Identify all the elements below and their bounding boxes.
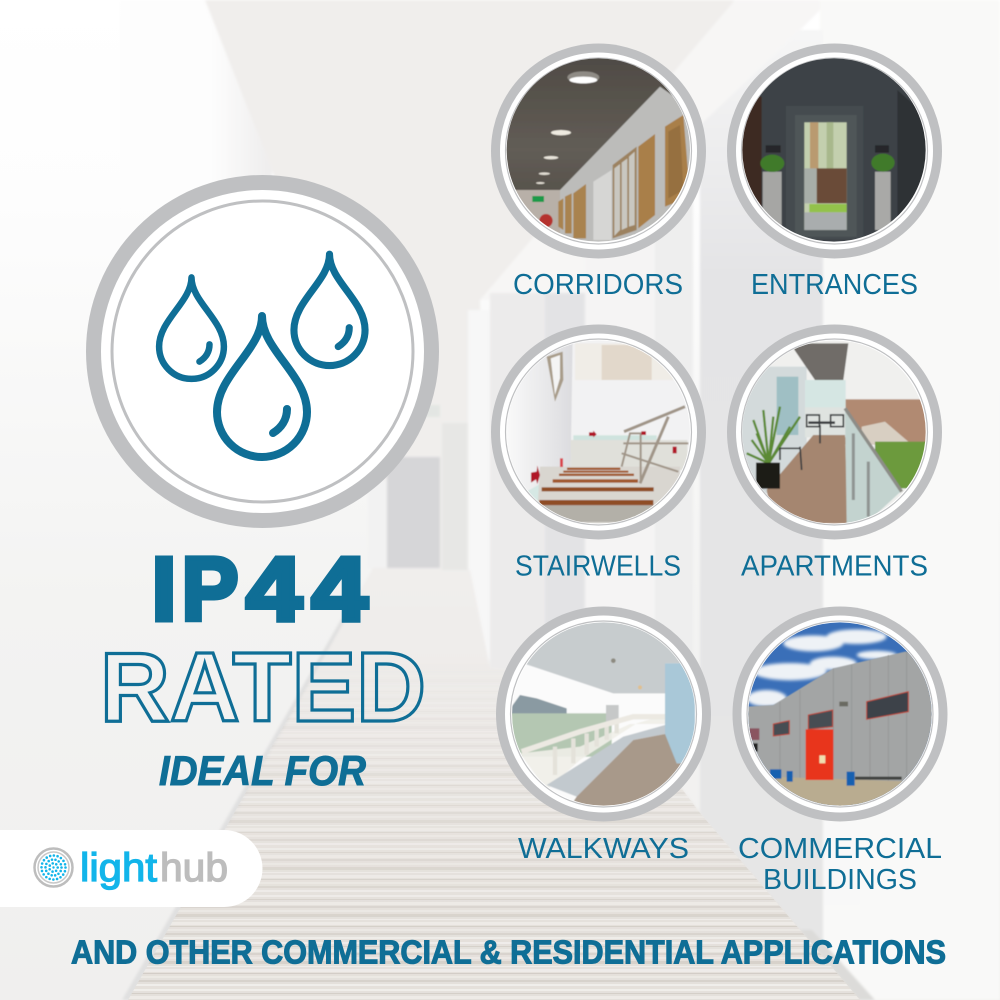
label: ENTRANCES [751, 269, 918, 301]
heading: IP44: 4 [312, 540, 368, 640]
panel: stairwells [491, 324, 706, 582]
heading: IDEAL FOR: IDEAL FOR [159, 747, 367, 794]
photo: walkway [510, 620, 700, 807]
photo: stairwell [503, 337, 693, 523]
panel: commercial buildings [732, 606, 948, 896]
heading: IP44: P [182, 540, 238, 640]
label: CORRIDORS [513, 269, 683, 301]
panel: apartments [727, 324, 942, 582]
logo wordmark: hub [160, 846, 228, 890]
heading: IP44: 4 [246, 540, 302, 640]
heading: RATED: RATED [100, 632, 426, 742]
photo: entrance [740, 57, 930, 243]
photo: apartment balcony [740, 337, 930, 523]
label: BUILDINGS [763, 864, 917, 896]
logo wordmark: light [80, 846, 157, 890]
label: WALKWAYS [518, 833, 689, 865]
logo pill [0, 830, 262, 907]
label: APARTMENTS [741, 550, 928, 582]
panel: entrances [727, 44, 942, 301]
photo: corridor [503, 57, 693, 243]
panel: corridors [491, 44, 706, 301]
label: COMMERCIAL [738, 833, 942, 865]
main badge: water drops [86, 175, 439, 528]
label: STAIRWELLS [515, 550, 681, 582]
footer text: AND OTHER COMMERCIAL & RESIDENTIAL APPLICATIONS [71, 934, 946, 970]
icon: lighthub logo mark [34, 848, 72, 886]
panel: walkways [496, 606, 711, 865]
photo: commercial building [747, 620, 937, 807]
heading: IP44: I [152, 540, 177, 640]
icon: water drops [159, 254, 365, 457]
